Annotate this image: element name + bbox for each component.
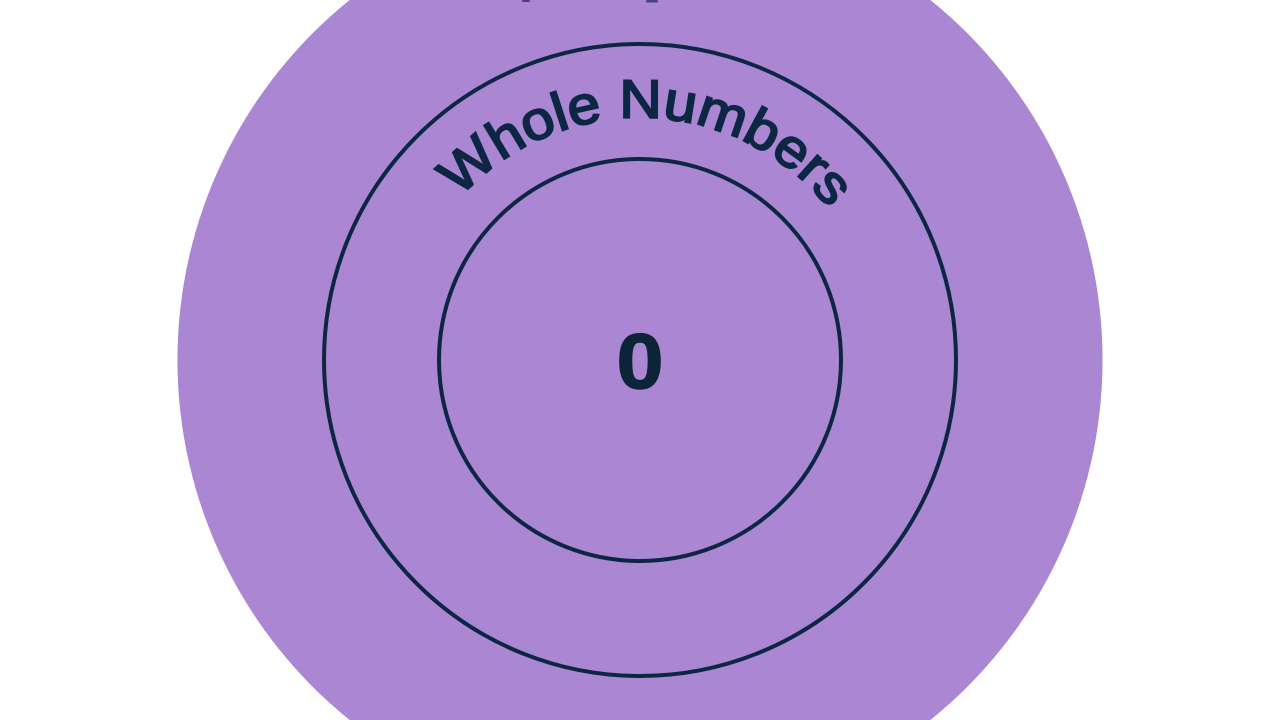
clipped descender marks at top edge bbox=[522, 0, 658, 2]
curved label: Whole Numbers: Whole Numbers bbox=[432, 80, 847, 205]
number zero: 0 bbox=[617, 319, 663, 405]
outer purple circle bbox=[177, 0, 1103, 720]
inner ring bbox=[439, 159, 841, 561]
whole numbers ring bbox=[324, 44, 956, 676]
